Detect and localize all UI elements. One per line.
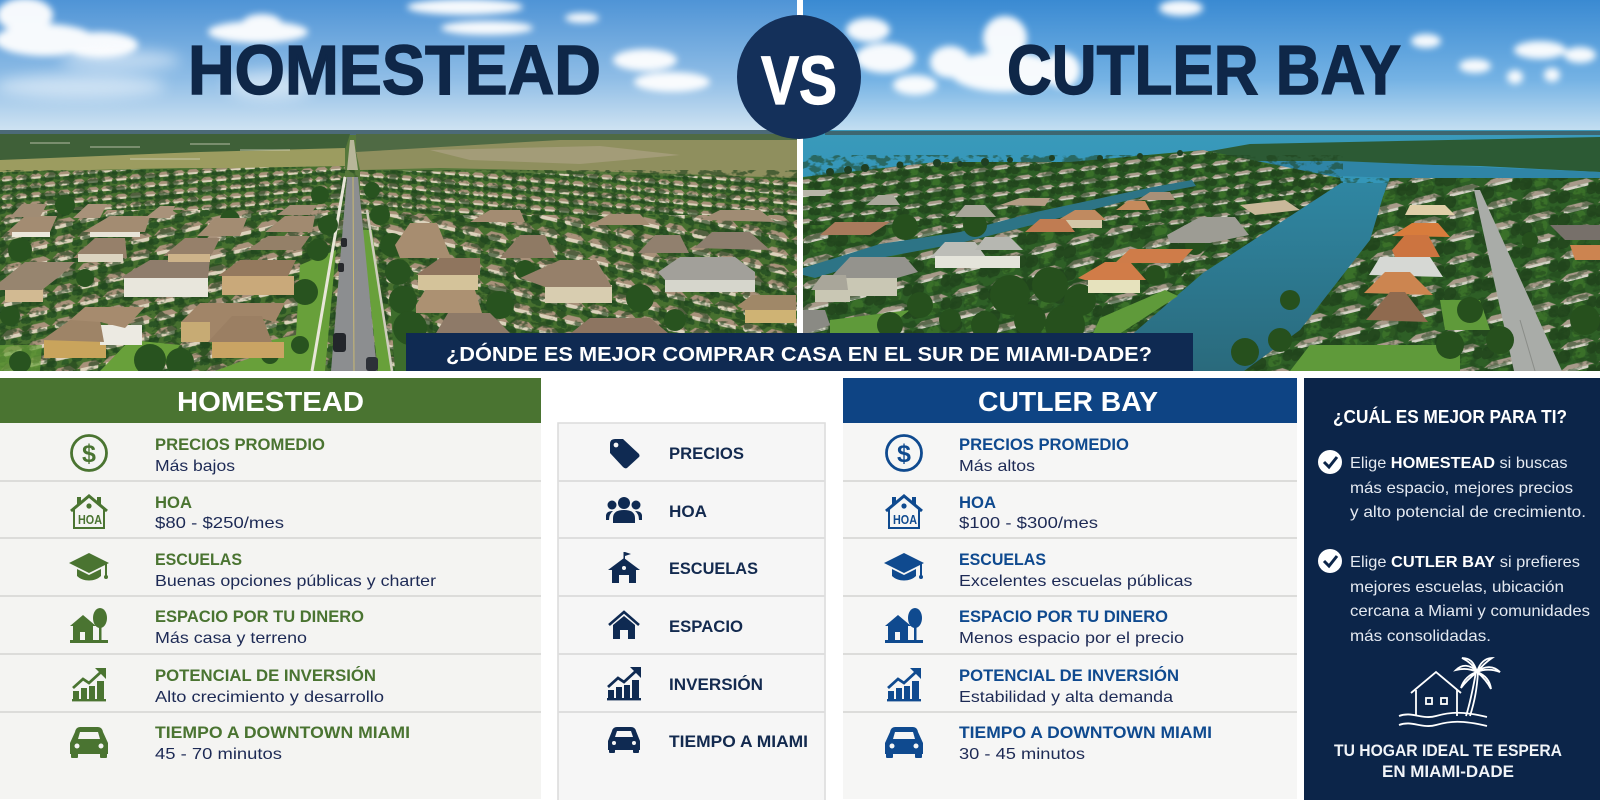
row: HOA: HOA <box>893 512 918 527</box>
houses <box>0 204 796 358</box>
recommendation: Cutler Bay: cercana a Miami y comunidades <box>1350 603 1590 620</box>
closing message: TU HOGAR IDEAL TE ESPERA <box>1334 741 1562 760</box>
row: precios <box>886 436 1129 475</box>
sky with clouds <box>803 0 1600 132</box>
recommendation: Cutler Bay: Elige CUTLER BAY si prefieres <box>1350 554 1580 571</box>
row: escuelas <box>608 552 758 583</box>
sea and land <box>803 130 1600 371</box>
row: espacio <box>885 608 1184 647</box>
palm silhouettes on shore <box>826 150 1183 176</box>
panel: recommendation <box>1304 378 1600 800</box>
row: precios: PRECIOS PROMEDIO <box>959 436 1129 454</box>
closing message <box>1334 741 1562 781</box>
row: escuelas: ESCUELAS <box>669 560 758 578</box>
row: HOA: HOA <box>155 494 192 512</box>
east bank <box>1244 178 1600 371</box>
row: HOA: HOA <box>959 494 996 512</box>
row: HOA: HOA <box>78 512 103 527</box>
row: precios: PRECIOS PROMEDIO <box>155 436 325 454</box>
row: escuelas <box>69 551 437 590</box>
recommendation: Homestead: Elige HOMESTEAD si buscas <box>1350 455 1568 472</box>
row: escuelas: Buenas opciones públicas y charter <box>155 573 437 590</box>
row: escuelas: ESCUELAS <box>155 551 242 569</box>
side canal <box>803 180 1196 278</box>
row: tiempo: TIEMPO A DOWNTOWN MIAMI <box>155 724 410 742</box>
panel: Homestead <box>0 378 541 799</box>
row: tiempo <box>608 727 808 753</box>
VS badge <box>737 15 861 139</box>
row: espacio <box>609 612 743 639</box>
west island <box>803 150 1342 333</box>
row: precios: Más altos <box>959 458 1035 475</box>
trees beside road <box>0 182 686 376</box>
main canal <box>1134 183 1387 371</box>
land and housing rows <box>0 130 797 376</box>
trees <box>877 213 1600 366</box>
row: precios: PRECIOS <box>669 445 744 463</box>
recommendation: Cutler Bay: mejores escuelas, ubicación <box>1350 579 1564 596</box>
subtitle banner <box>406 333 1193 371</box>
row: espacio <box>70 608 364 647</box>
row: tiempo: 30 - 45 minutos <box>959 746 1085 763</box>
title: Cutler Bay: CUTLER BAY <box>1007 31 1401 109</box>
panel: Cutler Bay <box>843 378 1297 799</box>
recommendation: Cutler Bay <box>1318 549 1590 645</box>
row: espacio: ESPACIO POR TU DINERO <box>959 608 1168 626</box>
row: escuelas: ESCUELAS <box>959 551 1046 569</box>
header: Homestead: HOMESTEAD <box>177 386 364 417</box>
row: escuelas: Excelentes escuelas públicas <box>959 573 1192 590</box>
row: HOA <box>71 494 284 532</box>
row: inversión: POTENCIAL DE INVERSIÓN <box>155 666 376 685</box>
row: precios <box>610 439 744 468</box>
header: Cutler Bay: CUTLER BAY <box>978 386 1158 417</box>
recommendation: Homestead: más espacio, mejores precios <box>1350 480 1573 497</box>
closing message: EN MIAMI-DADE <box>1382 762 1514 781</box>
row: inversión <box>887 666 1179 706</box>
row: HOA: $100 - $300/mes <box>959 515 1098 532</box>
lawns <box>830 290 1490 371</box>
row: inversión <box>607 667 763 700</box>
rows of houses: middle <box>0 210 345 371</box>
recommendation: Cutler Bay: más consolidadas. <box>1350 628 1491 645</box>
row: escuelas <box>884 551 1192 590</box>
header: Cutler Bay <box>843 378 1297 423</box>
far shore <box>1208 137 1600 172</box>
row: inversión: Estabilidad y alta demanda <box>959 689 1173 706</box>
row: inversión: Alto crecimiento y desarrollo <box>155 689 384 706</box>
row: HOA: $80 - $250/mes <box>155 515 284 532</box>
row: espacio: Más casa y terreno <box>155 630 307 647</box>
row: espacio: Menos espacio por el precio <box>959 630 1184 647</box>
row: tiempo: 45 - 70 minutos <box>155 746 282 763</box>
row: precios: $ <box>82 440 96 468</box>
row: tiempo: TIEMPO A MIAMI <box>669 733 808 751</box>
row: inversión: POTENCIAL DE INVERSIÓN <box>959 666 1179 685</box>
rows of houses: far <box>0 166 345 210</box>
sky with clouds <box>0 0 797 131</box>
east road <box>1474 190 1562 371</box>
row: precios: $ <box>897 440 911 468</box>
row: inversión <box>72 666 384 706</box>
lawns near the road <box>0 230 420 371</box>
divider between photos <box>797 0 803 371</box>
row: HOA <box>886 494 1098 532</box>
hero photo: Homestead <box>0 0 797 376</box>
panel heading: ¿CUÁL ES MEJOR PARA TI? <box>1333 406 1567 427</box>
houses <box>803 190 1600 335</box>
row: tiempo <box>70 724 410 763</box>
row: HOA <box>606 497 707 523</box>
row: tiempo <box>885 724 1212 763</box>
row: precios: Más bajos <box>155 458 235 475</box>
row: inversión: INVERSIÓN <box>669 675 763 694</box>
recommendation: Homestead: y alto potencial de crecimiento. <box>1350 504 1586 521</box>
header: Homestead <box>0 378 541 423</box>
title: Homestead: HOMESTEAD <box>188 31 601 109</box>
recommendation: Homestead <box>1318 450 1586 521</box>
row: precios <box>72 436 325 475</box>
hero photo: Cutler Bay <box>803 0 1600 371</box>
row: tiempo: TIEMPO A DOWNTOWN MIAMI <box>959 724 1212 742</box>
row: espacio: ESPACIO <box>669 618 743 636</box>
icon: house and palm <box>1399 658 1500 726</box>
subtitle banner: ¿DÓNDE ES MEJOR COMPRAR CASA EN EL SUR DE MIAMI-DADE? <box>446 342 1152 366</box>
panel: criteria <box>558 423 825 800</box>
VS badge: VS <box>761 42 837 119</box>
row: espacio: ESPACIO POR TU DINERO <box>155 608 364 626</box>
road <box>312 140 392 371</box>
far town and fields <box>0 134 797 178</box>
row: HOA: HOA <box>669 503 707 521</box>
